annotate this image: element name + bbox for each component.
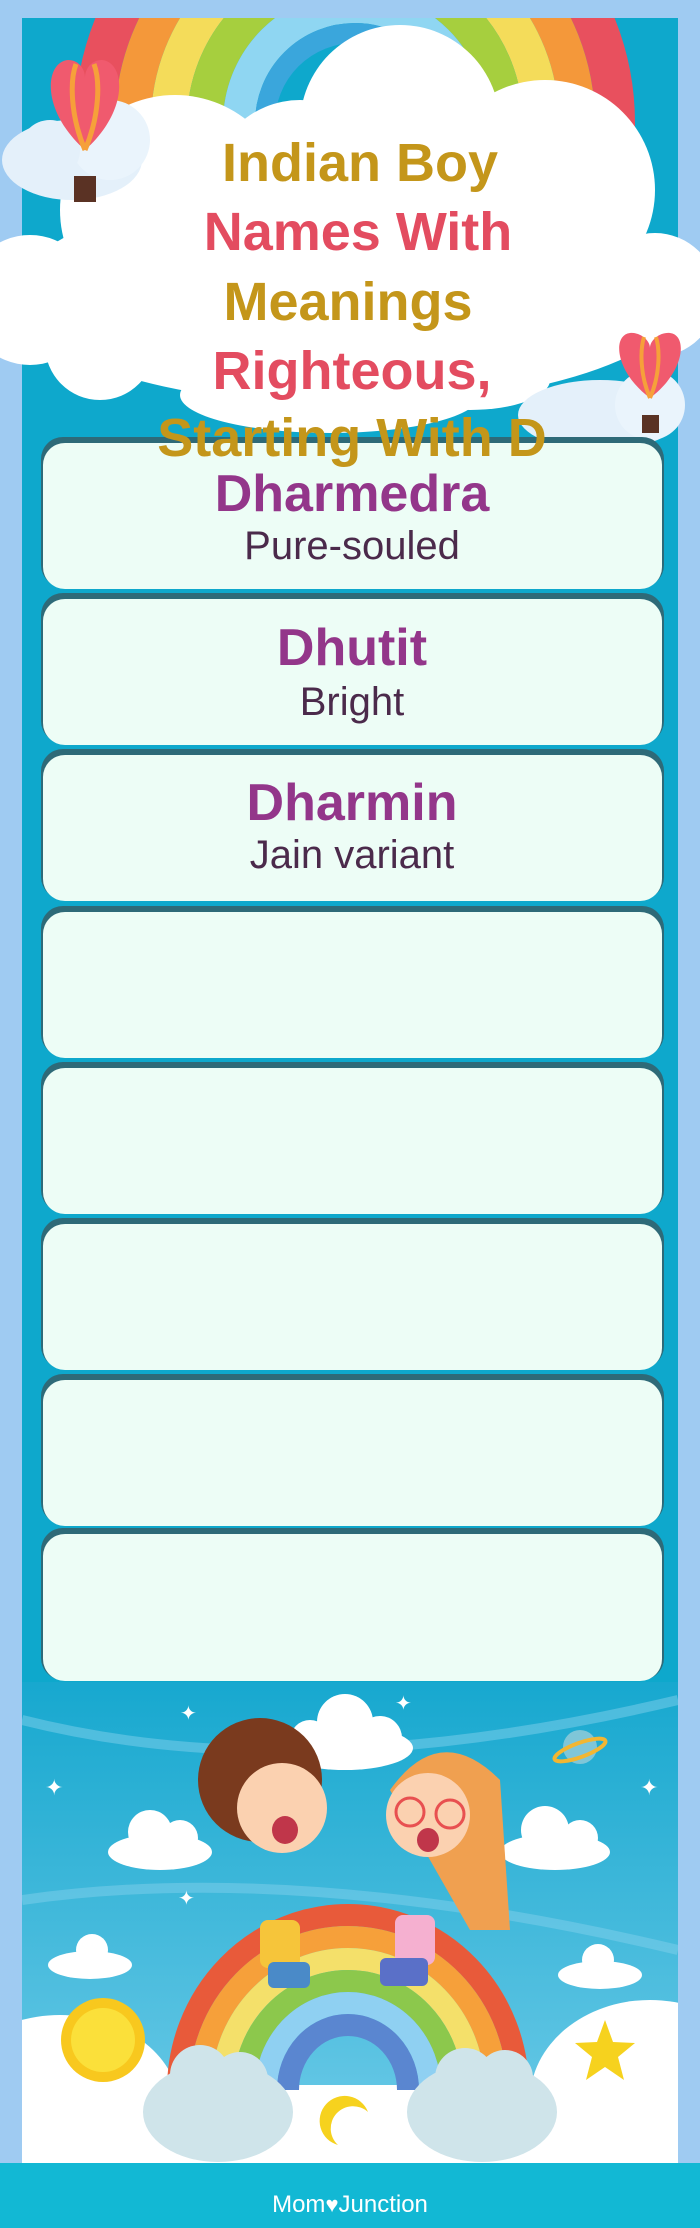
card 1: Pure-souled	[244, 524, 460, 568]
big title cloud	[0, 25, 700, 433]
footer	[0, 2163, 700, 2228]
card 5	[41, 1062, 664, 1214]
card 3: Dharmin	[247, 774, 457, 832]
card 2	[41, 593, 664, 745]
cloud bank	[22, 2000, 678, 2163]
card 2: Bright	[300, 680, 404, 724]
sparkles: ✦	[395, 1693, 412, 1715]
card 6	[41, 1218, 664, 1370]
girl	[380, 1752, 510, 1986]
card 2: Dhutit	[277, 619, 427, 677]
moon	[320, 2096, 368, 2145]
sky clouds	[48, 1694, 642, 1989]
boy	[198, 1718, 327, 1988]
top rainbow	[80, 18, 635, 127]
title: Righteous,	[212, 341, 492, 401]
title	[157, 133, 547, 468]
title: Indian Boy	[222, 133, 498, 193]
sparkles: ✦	[640, 1775, 658, 1800]
footer: Mom♥Junction	[272, 2191, 428, 2218]
sparkles: ✦	[515, 1843, 532, 1865]
title: Meanings	[223, 272, 473, 332]
card 3	[41, 749, 664, 901]
card 8	[41, 1528, 664, 1681]
sky streaks	[22, 1700, 678, 1950]
sun	[61, 1998, 145, 2082]
smiling clouds	[143, 2045, 557, 2162]
card 1	[41, 437, 664, 589]
sparkles: ✦	[178, 1888, 195, 1910]
bottom rainbow	[178, 1915, 518, 2090]
sparkles: ✦	[180, 1703, 197, 1725]
card 3: Jain variant	[250, 833, 454, 877]
card 4	[41, 906, 664, 1058]
sparkles	[45, 1693, 658, 1910]
planet	[552, 1730, 608, 1766]
card 7	[41, 1374, 664, 1526]
star	[575, 2020, 635, 2080]
sparkles: ✦	[45, 1775, 63, 1800]
cards	[41, 437, 664, 1681]
title: Names With	[204, 202, 512, 262]
card 1: Dharmedra	[215, 465, 490, 523]
bottom illustration	[22, 1682, 678, 2163]
balloon right	[518, 333, 685, 450]
balloon left	[2, 60, 150, 202]
title: Starting With D	[157, 408, 547, 468]
